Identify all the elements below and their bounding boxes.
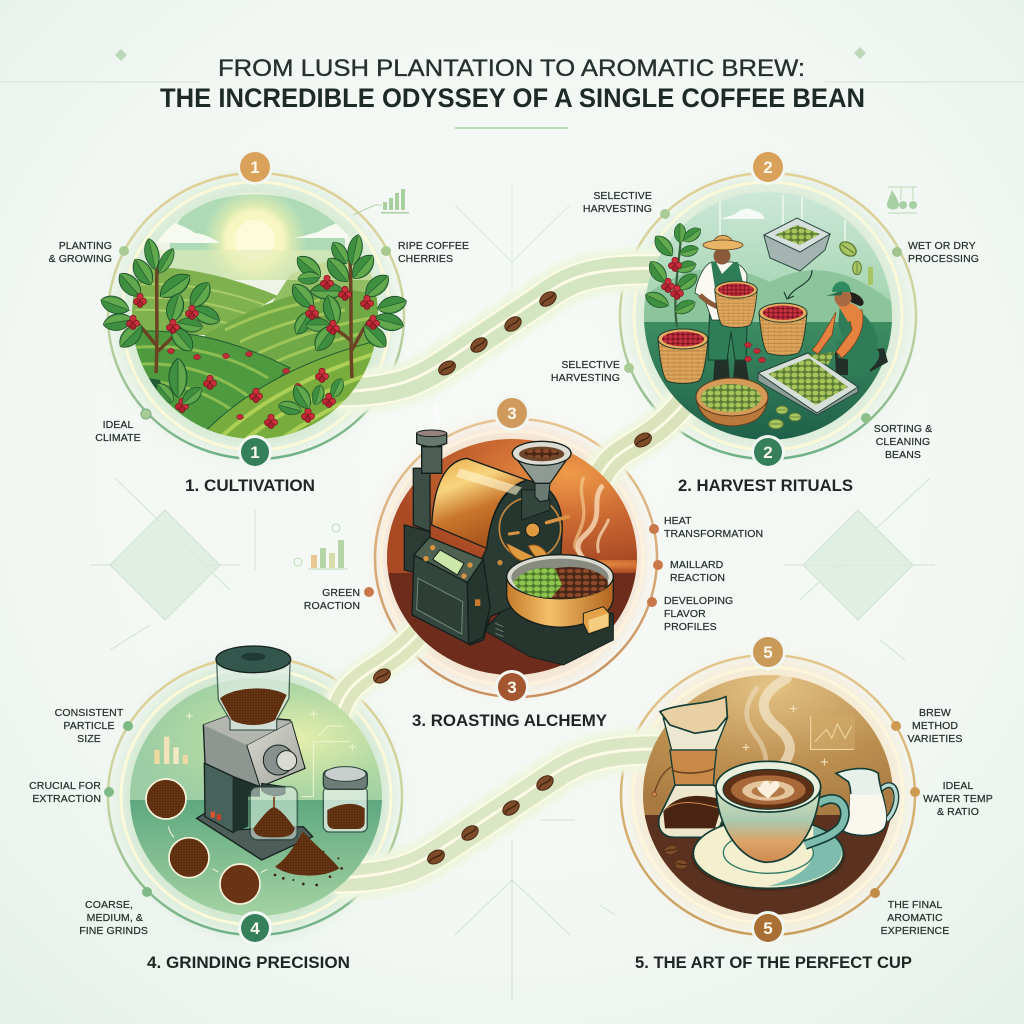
heading: 3 roasting alchemy: 3. ROASTING ALCHEMY xyxy=(412,711,608,730)
label: wet or dry processing: WET OR DRY xyxy=(908,240,976,252)
badge 2 top: 2 xyxy=(763,158,773,177)
ground leaves xyxy=(152,358,347,417)
badge 5 top: 5 xyxy=(763,643,773,662)
chimney xyxy=(413,468,430,532)
label: sorting and cleaning: SORTING & xyxy=(874,423,932,435)
badge 1 bottom xyxy=(238,435,272,469)
badge 3 top: 3 xyxy=(507,404,517,423)
icon: sun xyxy=(222,207,288,260)
icon: milk jug xyxy=(836,769,896,836)
small icon: rising bars xyxy=(353,189,409,215)
label: heat transformation: TRANSFORMATION xyxy=(664,528,763,540)
label: maillard reaction: MAILLARD xyxy=(670,559,724,571)
icon: saucer xyxy=(691,818,846,891)
title xyxy=(160,55,865,128)
label: ripe coffee cherries: CHERRIES xyxy=(398,253,453,265)
icon: beans on path xyxy=(425,773,556,867)
label: planting and growing: & GROWING xyxy=(49,253,112,265)
label: ideal water temp ratio: & RATIO xyxy=(937,806,979,818)
catch cup xyxy=(250,787,297,840)
label: brew method varieties: VARIETIES xyxy=(908,733,962,745)
flames and steam xyxy=(575,478,608,557)
label: sorting and cleaning: CLEANING xyxy=(876,436,930,448)
labels: grinding xyxy=(29,707,148,937)
label: wet or dry processing: PROCESSING xyxy=(908,253,979,265)
label: coarse medium fine: COARSE, xyxy=(85,899,133,911)
label: developing flavor profiles: PROFILES xyxy=(664,621,717,633)
steam xyxy=(747,678,790,777)
label: planting and growing: PLANTING xyxy=(59,240,112,252)
panel: stage rings xyxy=(108,173,916,935)
labels: harvest xyxy=(551,190,979,461)
badge 3 bottom xyxy=(495,670,529,704)
label: crucial for extraction: CRUCIAL FOR xyxy=(29,780,101,792)
heading: 4 grinding precision: 4. GRINDING PRECISION xyxy=(147,953,350,972)
badge 5 bottom xyxy=(751,911,785,945)
drum body xyxy=(470,480,562,645)
heading: 1 cultivation: 1. CULTIVATION xyxy=(185,476,315,495)
label: consistent particle size: PARTICLE xyxy=(63,720,115,732)
icon: storage jar xyxy=(323,767,367,832)
small icon: processing rack xyxy=(887,187,917,213)
label: consistent particle size: SIZE xyxy=(77,733,101,745)
label: ripe coffee cherries: RIPE COFFEE xyxy=(398,240,469,252)
clouds xyxy=(156,223,350,243)
labels: perfect cup xyxy=(881,707,993,937)
funnel xyxy=(522,490,550,520)
label: heat transformation: HEAT xyxy=(664,515,692,527)
label: selective harvesting top: HARVESTING xyxy=(583,203,652,215)
label: selective harvesting lower: HARVESTING xyxy=(551,372,620,384)
figure: crouching worker xyxy=(812,282,888,378)
icon: ground coffee pile xyxy=(274,832,343,886)
icon: bean xyxy=(632,430,654,450)
label: developing flavor profiles: FLAVOR xyxy=(664,608,706,620)
label: selective harvesting lower: SELECTIVE xyxy=(561,359,620,371)
label: final aromatic experience: EXPERIENCE xyxy=(881,925,949,937)
label: sorting and cleaning: BEANS xyxy=(885,449,921,461)
label: brew method varieties: METHOD xyxy=(912,720,958,732)
badge 2 top xyxy=(750,149,786,185)
bar chart xyxy=(154,737,188,764)
badge 3 top xyxy=(494,395,530,431)
badge 5 top xyxy=(750,634,786,670)
heading: 5 the art of the perfect cup: 5. THE ART OF THE PERFECT CUP xyxy=(635,953,912,972)
icon: coffee roaster xyxy=(404,405,613,665)
icon: mini line chart xyxy=(810,715,855,750)
badge 3 bottom: 3 xyxy=(507,678,517,697)
icon: medium grind sample xyxy=(169,838,209,878)
badge 1 top: 1 xyxy=(250,158,260,177)
badge 2 bottom: 2 xyxy=(763,443,773,462)
labels: cultivation xyxy=(49,240,469,444)
title divider xyxy=(455,127,568,129)
icon: sorting tray xyxy=(758,352,858,415)
ring markers xyxy=(104,209,920,898)
label: brew method varieties: BREW xyxy=(919,707,951,719)
icon: grinder xyxy=(197,646,313,860)
path: cultivation to harvest xyxy=(335,268,665,392)
cooling tray xyxy=(507,577,613,627)
icon: fine grind sample xyxy=(220,864,260,904)
icon: latte cup xyxy=(716,761,845,862)
labels: roasting xyxy=(304,515,763,633)
hills xyxy=(128,250,392,445)
small icon: green bars xyxy=(294,524,348,569)
badge 5 bottom: 5 xyxy=(763,919,773,938)
path: grinding to cup xyxy=(335,749,665,878)
icon: beans on path xyxy=(436,289,559,378)
icon: middle cherry basket xyxy=(759,303,807,355)
badge 2 bottom xyxy=(751,435,785,469)
icon: bean xyxy=(371,666,393,686)
label: selective harvesting top: SELECTIVE xyxy=(593,190,652,202)
title line 2: THE INCREDIBLE ODYSSEY OF A SINGLE COFFEE BEAN xyxy=(160,83,865,113)
badge 1 bottom: 1 xyxy=(250,443,260,462)
label: ideal water temp ratio: IDEAL xyxy=(943,780,973,792)
label: ideal climate: CLIMATE xyxy=(95,432,141,444)
icon: suspended tray xyxy=(764,218,830,271)
icon: coffee plant xyxy=(642,223,704,327)
icon: pour-over carafe xyxy=(652,697,732,837)
label: developing flavor profiles: DEVELOPING xyxy=(664,595,733,607)
label: coarse medium fine: FINE GRINDS xyxy=(79,925,148,937)
sparkles xyxy=(743,705,828,766)
label: final aromatic experience: THE FINAL xyxy=(888,899,942,911)
label: ideal water temp ratio: WATER TEMP xyxy=(923,793,993,805)
badge 4 bottom xyxy=(238,911,272,945)
panel: 4 grinding illustration xyxy=(125,646,390,920)
label: green roaction: ROACTION xyxy=(304,600,360,612)
arrow xyxy=(784,270,812,299)
scattered cherries xyxy=(168,348,336,429)
badges: top number markers xyxy=(237,149,786,670)
path: harvest to roasting xyxy=(592,392,692,494)
label: green roaction: GREEN xyxy=(322,587,360,599)
badges: bottom number markers xyxy=(238,435,785,945)
title line 1: FROM LUSH PLANTATION TO AROMATIC BREW: xyxy=(218,55,805,82)
icon: red cherry basket xyxy=(658,329,708,384)
panel: 1 cultivation illustration xyxy=(132,193,378,438)
panel: 5 perfect cup illustration xyxy=(640,670,900,920)
steam above chimney xyxy=(436,405,439,430)
label: final aromatic experience: AROMATIC xyxy=(887,912,943,924)
path: roasting to grinding xyxy=(335,622,428,722)
panel: 3 roasting illustration xyxy=(387,430,637,674)
label: maillard reaction: REACTION xyxy=(670,572,725,584)
label: consistent particle size: CONSISTENT xyxy=(55,707,124,719)
panel: stage halos xyxy=(117,178,906,933)
icon: loose green beans xyxy=(837,239,873,285)
figure: farmer with basket xyxy=(695,236,757,383)
decorative line and plus marks xyxy=(186,710,356,797)
label: crucial for extraction: EXTRACTION xyxy=(32,793,101,805)
panel: 2 harvest illustration xyxy=(640,190,900,442)
tree: right coffee plant xyxy=(287,233,409,378)
badge 4 bottom: 4 xyxy=(250,919,260,938)
icon: loose cherries xyxy=(745,342,765,363)
control panel xyxy=(414,537,483,583)
heading: 2 harvest rituals: 2. HARVEST RITUALS xyxy=(678,476,853,495)
label: coarse medium fine: MEDIUM, & xyxy=(87,912,143,924)
tree: left coffee plant xyxy=(98,237,223,373)
badge 1 top xyxy=(237,149,273,185)
label: ideal climate: IDEAL xyxy=(103,419,133,431)
icon: bowl of green beans xyxy=(696,378,768,426)
icon: green beans on ground xyxy=(769,406,801,429)
hopper xyxy=(217,662,290,730)
icon: coffee beans on table xyxy=(663,844,688,870)
icon: coarse grind sample xyxy=(146,779,186,819)
